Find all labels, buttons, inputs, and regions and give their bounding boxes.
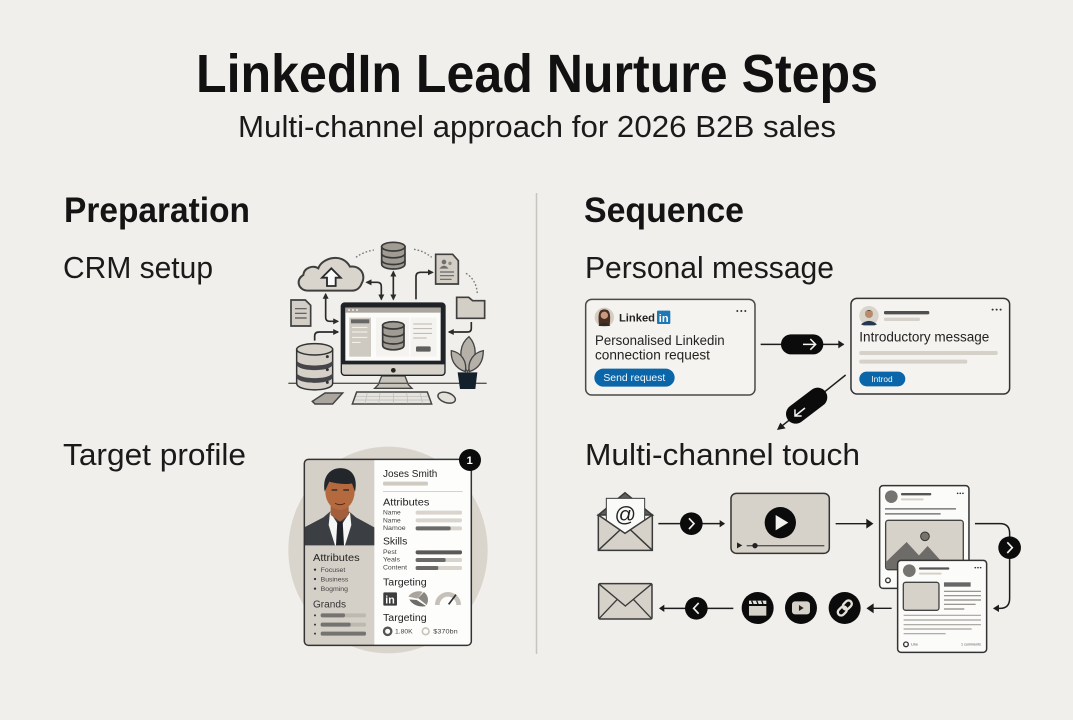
arrow right	[761, 334, 844, 354]
folder	[457, 297, 485, 318]
keyboard	[352, 392, 432, 404]
card: connection request: Linked	[619, 313, 655, 325]
illustration: target profile card: 1	[466, 455, 473, 467]
post card: article	[898, 560, 987, 652]
card: introductory message	[851, 298, 1010, 394]
label: Target profile: Target profile	[63, 437, 246, 472]
illustration: target profile card: Targeting	[383, 613, 427, 624]
illustration: target profile card	[288, 447, 488, 653]
icon: video	[785, 592, 817, 624]
post card: image	[880, 486, 969, 588]
card: connection request: Send request	[603, 373, 665, 384]
illustration: multi-channel flow	[598, 486, 1021, 652]
desk line	[288, 381, 487, 385]
illustration: target profile card: Content	[383, 565, 407, 572]
gauge icon	[437, 594, 459, 605]
label: Personal message: Personal message	[585, 250, 834, 285]
icon: open email	[598, 493, 652, 550]
illustration: CRM setup	[288, 242, 487, 405]
label: CRM setup: CRM setup	[63, 250, 213, 285]
illustration: target profile card: Yeals	[383, 557, 400, 564]
illustration: target profile card: Name	[383, 510, 401, 517]
icon: closed envelope	[599, 584, 652, 619]
heading: Preparation: Preparation	[64, 191, 250, 230]
card: connection request: connection request	[595, 347, 710, 362]
card: connection request	[586, 299, 755, 395]
card: connection request: in	[659, 313, 669, 325]
monitor	[375, 376, 412, 388]
title: LinkedIn Lead Nurture Steps	[196, 44, 878, 104]
cloud	[299, 258, 363, 291]
card: connection request: Personalised Linkedin	[595, 333, 725, 348]
right column text: Joses Smith	[383, 469, 437, 480]
document left	[291, 300, 311, 326]
phone	[312, 393, 343, 404]
subtitle: Multi-channel approach for 2026 B2B sales	[238, 109, 836, 144]
dotted connectors	[356, 249, 477, 294]
card: introductory message: Introductory message	[859, 330, 989, 345]
post card: article: Like	[911, 643, 918, 647]
server stack	[297, 344, 333, 390]
card: introductory message: Introd	[871, 374, 893, 384]
heading: Sequence: Sequence	[584, 191, 744, 230]
label: Multi-channel touch: Multi-channel touch	[585, 437, 860, 472]
illustration: personal message flow	[586, 298, 1010, 430]
portrait	[304, 468, 374, 545]
badge	[459, 449, 481, 471]
illustration: target profile card: Targeting	[383, 577, 427, 588]
top database	[382, 242, 405, 269]
illustration: target profile card: Skills	[383, 536, 407, 547]
icon: link	[829, 592, 861, 624]
icon: clapperboard	[742, 592, 774, 624]
document with person	[436, 254, 458, 284]
connector with chevron	[975, 524, 1021, 612]
illustration: target profile card: Grands	[313, 599, 346, 610]
illustration: target profile card: Business	[321, 576, 349, 583]
video player	[731, 493, 829, 553]
illustration: target profile card: Namoe	[383, 525, 406, 532]
arrow	[836, 520, 872, 527]
arrow diagonal	[777, 375, 846, 430]
post card: article: 1 comments	[961, 643, 981, 647]
plant	[451, 337, 483, 372]
illustration: target profile card: Bogming	[321, 586, 348, 593]
illustration: target profile card: 1.80K	[395, 629, 413, 636]
LinkedIn glyph	[383, 592, 397, 606]
illustration: target profile card: Attributes	[383, 497, 429, 508]
illustration: target profile card: Name	[383, 517, 401, 524]
mouse	[437, 390, 457, 405]
illustration: target profile card: in	[385, 595, 395, 607]
arrows	[315, 272, 471, 341]
illustration: target profile card: Focuset	[321, 567, 345, 574]
illustration: target profile card: $370bn	[433, 629, 458, 636]
arrow with chevron	[658, 512, 725, 535]
arrow	[868, 605, 892, 612]
left column text: Attributes	[313, 553, 360, 564]
illustration: target profile card: Pest	[383, 549, 397, 556]
arrow with chevron left	[659, 597, 733, 620]
icon: open email: @	[615, 502, 636, 526]
pie icon	[418, 592, 428, 605]
